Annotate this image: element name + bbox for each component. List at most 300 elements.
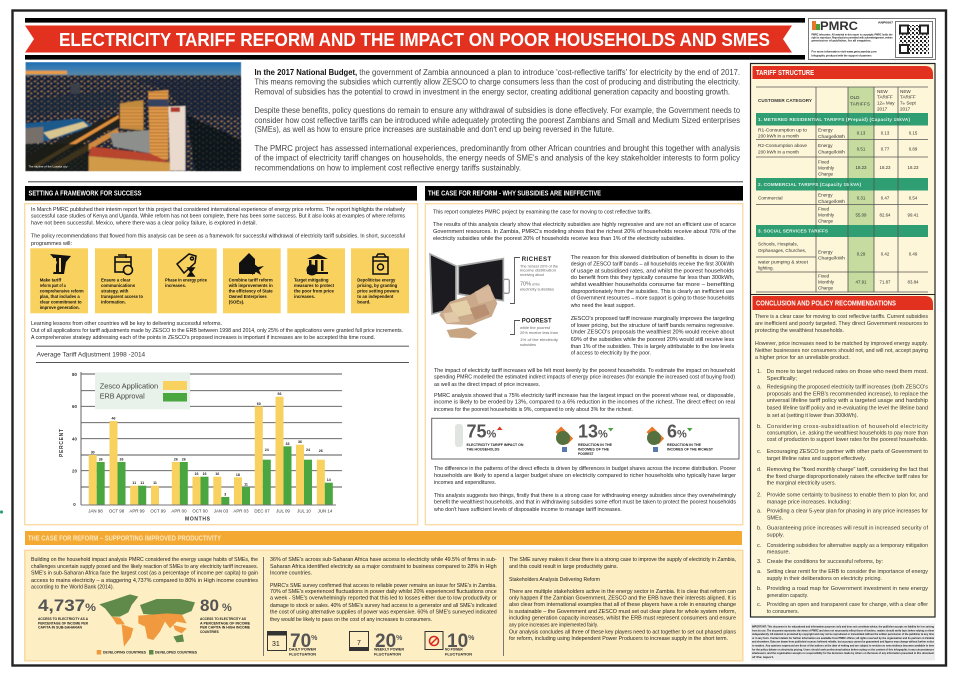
stat: 13%: REDUCTION IN THE (578, 443, 612, 447)
stat: 80%: PER CAPITA IN HIGH INCOME (200, 626, 250, 630)
intro text: Removal of subsidies has the potential to crowd in investment in the energy sector, creating additional generation capacity and boosting growth. (254, 87, 730, 97)
column 2 text: Income countries. (270, 570, 312, 576)
bar value labels: 24 (306, 448, 310, 452)
map legend: DEVELOPED COUNTRIES (155, 650, 197, 654)
tile: phase in price increases (158, 248, 217, 313)
table row labels: Charge (818, 286, 834, 290)
heading: SETTING A FRAMEWORK FOR SUCCESS (28, 191, 142, 198)
text: skewed distribution: of access to electricity by the poor. (571, 350, 651, 356)
opening text: electricity subsidies while the poorest 20% of households receive less than 1% of the electricity subsidies. (433, 236, 685, 242)
callout: poorest: while the poorest (520, 326, 550, 330)
stat: 75%: 75% (466, 422, 497, 442)
stat: 80%: COUNTRIES (200, 630, 219, 634)
chart legend (95, 372, 190, 409)
copyright note: Infographic produced with the support of partners (812, 54, 872, 58)
stat: 4,737%: ACCESS TO ELECTRICITY AS A (38, 617, 89, 621)
recommendations list: supply. (767, 533, 784, 539)
framework text: programmes will: (31, 241, 72, 247)
recommendations list: consumption, i.e. asking the wealthiest households to pay more than (767, 431, 928, 437)
recommendations list: Provide some certainty to business to enable them to plan for, and (767, 493, 928, 499)
bar value labels: 26 (174, 458, 178, 462)
table row labels: 200 kWh in a month (758, 134, 799, 138)
world map (99, 594, 195, 647)
recommendations list: b. (757, 526, 762, 532)
table row labels: Monthly (818, 280, 835, 284)
table row labels: Charge/kWh (818, 256, 845, 260)
heading: THE CASE FOR REFORM - WHY SUBSIDIES ARE INEFFECTIVE (428, 191, 601, 198)
stat: 20% weekly (350, 631, 405, 656)
disclaimer: and elsewhere. Data are drawn from published sources believed reliable, but accuracy cannot be guaranteed and figures may change without further notice (752, 640, 934, 644)
disclaimer: to readers. Any opinions expressed are those of the authors at the date of writing and are subject to revision as new evidence becomes available in time (752, 644, 934, 648)
stat: 10% none: FLUCTUATION (445, 652, 473, 656)
framework text (31, 207, 405, 247)
text: impact on households (434, 368, 735, 413)
conclusion text: protecting the wealthiest households. (755, 328, 844, 334)
tile text: Combine tariff reform (229, 278, 273, 282)
tile text: improve generation. (40, 305, 80, 310)
tile text (228, 278, 273, 304)
x axis labels: APR 03 (233, 508, 249, 514)
table row labels: water pumping & street (758, 260, 809, 264)
section labels: 2. COMMERCIAL TARIFFS (Capacity 15 kVA) (758, 182, 861, 187)
icon: calendar: 7 (357, 640, 361, 647)
text: budget shares: benefit the wealthiest households, and that in withdrawing subsidies some effort must be taken to protect the poorest households (434, 500, 736, 506)
tile text: the efficiency of State (229, 288, 273, 294)
conclusion text: However, price increases need to be matched by improved energy supply. (755, 341, 928, 347)
tile text: with improvements in (228, 283, 273, 288)
disclaimer (751, 624, 935, 660)
text: impact on households: PMRC analysis showed that a 75% electricity tariff increase has the largest impact on the poorest whose real, or disposable, (434, 393, 735, 399)
recommendations list: the marginal electricity users. (767, 481, 836, 487)
table row labels: Orphanages, Churches, (758, 248, 806, 253)
table row labels: Energy (818, 250, 833, 254)
column 3 text: Our analysis concludes all three of these key players need to act together to set out phased plans (509, 630, 736, 636)
stat: 80% (200, 596, 250, 634)
text: skewed distribution: of usage at subsidised rates, and whilst the poorest households (571, 268, 734, 274)
chart legend: ERB Approval (100, 392, 145, 400)
recommendations list: proposals and the ERB's recommended increase), to replace the (767, 392, 928, 398)
column 2 text: they would be likely to pass on the cost of any increases to consumers. (270, 617, 432, 623)
table row labels: Fixed (818, 274, 830, 278)
stat: 10% none (425, 631, 475, 656)
recommendations list: Providing a road map for Government investment in new energy (767, 586, 928, 592)
column 1 text: Building on the household impact analysis PMRC considered the energy usage habits of SMEs, the (31, 557, 258, 563)
map legend: DEVELOPING COUNTRIES (103, 650, 146, 654)
tile text (357, 278, 400, 304)
callout: richest: electricity subsidies (520, 288, 554, 292)
table header text: TARIFFS (850, 102, 870, 106)
tile text (40, 278, 84, 310)
table values: 18.23 (908, 165, 919, 170)
conclusion text: Neither businesses nor consumers should not, and will not, accept paying (755, 348, 928, 354)
framework text: In March PMRC published their interim report for this project that considered international experience of energy price reforms. The report highlights the relatively (31, 207, 405, 213)
bar value labels: 18 (236, 473, 240, 477)
recommendations list: d. (757, 467, 762, 473)
copyright note: For more information visit www.pmrczambia.com (812, 50, 877, 54)
column 1 text: SME's in sub-Saharan Africa face the largest cost (as a percentage of income per capita) to gain (31, 570, 258, 576)
framework text: successful case studies of Kenya and Uganda. While reform has not been complete, there has been some success. But it also looks at examples of where reforms (31, 214, 405, 220)
table row labels: Schools, Hospitals, (758, 242, 798, 246)
text: budget shares: incomes and expenditures. (434, 480, 496, 486)
intro text: consider how cost reflective tariffs can be introduced while adequately protecting the poorest Zambians and Small and Medium Sized enterprises (254, 115, 740, 125)
bar value labels: 26 (319, 449, 323, 453)
bars: ERB approval (97, 446, 333, 505)
recommendations list: measure. (767, 550, 790, 556)
bars: Zesco application (89, 397, 325, 505)
stat: 13%: 13% (578, 422, 608, 442)
callout: richest (510, 257, 558, 304)
y axis labels: 60 (72, 404, 77, 409)
tile text: communications (101, 283, 136, 288)
column 3 text: any price increases are implemented fairly. (509, 622, 598, 628)
table values: 0.13 (857, 130, 866, 136)
icon: meter (556, 427, 573, 452)
stat: 80%: 80 % (200, 596, 232, 615)
bar value labels: 11 (244, 482, 248, 486)
recommendations list: c. (757, 449, 762, 455)
disclaimer: independently. All material is protected by copyright and may not be reproduced or transmitted without the written permission of the publisher at any time (752, 632, 934, 636)
recommendations list: Considering cross-subsidisation of household electricity (767, 424, 928, 430)
text: skewed distribution: ZESCO's proposed tariff increase marginally improves the targeting (571, 316, 734, 322)
text: skewed distribution: disproportionately from the subsidies. This is clearly an inefficient use (571, 289, 734, 295)
tariff table (756, 87, 928, 292)
y axis labels: 80 (72, 372, 77, 377)
column 1 text: according to the World Bank (2014). (31, 584, 114, 590)
stat: 70% daily: 70 (290, 631, 311, 652)
callout: richest: The richest 20% of the (520, 264, 558, 268)
copyright note: PMRC infocentre. All material in this report is copyright; PMRC holds the (812, 32, 893, 36)
table values: 18.23 (856, 165, 867, 170)
x axis labels: OCT 00 (192, 508, 208, 514)
tile text: measures to protect (294, 283, 335, 288)
bar value labels: 14 (327, 478, 331, 482)
recommendations list: c. (757, 602, 762, 608)
bar value labels: 30 (91, 450, 95, 454)
table values: 0.89 (909, 146, 918, 152)
recommendations list: Do more to target reduced rates on those who need them most. (767, 369, 928, 375)
conclusion text (755, 314, 928, 361)
table values: 0.13 (881, 130, 890, 136)
table values: 83.84 (908, 280, 919, 284)
y axis labels (72, 372, 77, 507)
section labels: 3. SOCIAL SERVICES TARIFFS (758, 228, 828, 234)
bar value labels: 66 (278, 392, 282, 396)
heading (425, 186, 743, 201)
callout: poorest: POOREST (522, 318, 552, 324)
y axis labels: 40 (72, 436, 77, 442)
table row labels: 200 kWh in a month (758, 150, 799, 154)
stat: 80%: ACCESS TO ELECTRICITY AS (200, 617, 246, 621)
column 1 text: challenges uncertain supply posed and the likely reaction of SMEs to any electricity tariff increases. (31, 564, 258, 570)
text: budget shares (433, 466, 736, 513)
stat: 6%: REDUCTION IN THE (667, 443, 701, 447)
x axis labels: APR 99 (129, 508, 145, 514)
table row labels: Charge/kWh (818, 134, 845, 139)
lessons text: Learning lessons from other countries will be key to delivering successful reforms. (31, 321, 222, 327)
column 1 text (31, 557, 258, 590)
table row labels: Charge/kWh (818, 150, 845, 154)
tile text: price setting powers (357, 288, 400, 294)
recommendations list: 3. (757, 559, 762, 565)
x axis title: MONTHS (185, 516, 211, 522)
tile: efficiency of state enterprises (223, 248, 281, 313)
copyright note (812, 32, 893, 58)
lessons text: Out of all applications for tariff adjustments made by ZESCO to the ERB between 1998 and 2014, only 25% of the applications were granted full price increments. (31, 328, 403, 334)
icon: price tag (177, 254, 196, 276)
callout: richest: receiving about (520, 273, 544, 277)
stat: 10% none: % (468, 635, 475, 642)
table row labels: lighting. (758, 266, 774, 270)
text: skewed distribution: than 1% of the subsidies. This is largely attributable to the low levels (571, 344, 734, 350)
recommendations list: Specifically; (767, 376, 797, 382)
panel: supporting improved productivity (25, 531, 743, 661)
tile text: board. (357, 300, 370, 304)
stat: 70% daily: FLUCTUATION (289, 652, 317, 656)
table row labels: R1-Consumption up to (758, 128, 807, 132)
table values: 0.54 (909, 196, 918, 200)
table header text: OLD (850, 95, 860, 100)
tile text: to an independent (357, 294, 394, 299)
table row labels: Fixed (818, 160, 830, 164)
table header text: 2017 (877, 106, 888, 112)
conclusion text: a higher price for an unreliable product. (755, 355, 850, 361)
tile text: comprehensive reform (40, 288, 84, 294)
text: skewed distribution: whilst wealthier households consume far more – benefiting (570, 282, 734, 288)
x axis labels: OCT 98 (109, 508, 125, 514)
column 3 text: The SME survey makes it clear there is a strong case to improve the supply of electricity in Zambia, (509, 557, 736, 563)
text: skewed distribution: design of ZESCO tariff bands – all households receive the first 300kWh (571, 262, 734, 268)
recommendations list: a. (757, 569, 762, 575)
section labels (758, 117, 910, 234)
heading (25, 531, 742, 545)
tile text: Make tariff (40, 278, 62, 282)
icon: meter (647, 427, 664, 452)
green marker dot (0, 510, 3, 514)
column 1 text: access to mains electricity – a staggering 4,737% compared to 80% in High income countries (31, 578, 258, 584)
table header text: TARIFF (900, 95, 916, 100)
table header text: 2017 (900, 106, 911, 112)
intro text: (SMEs), as well as how to ensure price increases are sustainable and don't end up being reversed in the future. (254, 124, 614, 134)
table row labels: Charge (818, 172, 834, 176)
callout: poorest: 20% receive less than (520, 331, 558, 335)
stat: 4,737%: 4,737 % (38, 596, 96, 615)
stat: 13%: POOREST (578, 452, 594, 456)
stat: 20% weekly: 20 (375, 631, 396, 652)
conclusion text: There is a clear case for moving to cost reflective tariffs. Current subsidies (755, 314, 928, 320)
column 2 text: the cost of using alternative supplies of power was expensive. 60% of SME's surveyed indicated (270, 610, 497, 616)
column 2 text: 70% of SME's experienced fluctuations in power daily whilst 20% experienced fluctuations once (270, 589, 497, 595)
photo: Lusaka city at dusk (25, 62, 241, 171)
icon: PMRC mark (812, 21, 820, 30)
icon: institution and globe (306, 254, 328, 276)
bar value labels: 16 (194, 472, 198, 476)
bar value labels: 11 (132, 481, 136, 485)
table row labels: Charge (818, 218, 834, 224)
column 3 text: also clear from international examples that all of these players have a role in ensuring change (509, 602, 736, 608)
recommendations list: 2. (757, 493, 762, 499)
tile: make tariff reform part of a plan (30, 248, 88, 313)
tile text (101, 278, 143, 304)
table row labels: Fixed (818, 206, 830, 212)
column 3 text: is sustainable – the Government and ZESCO must set out clear plans for whole system reform, (509, 609, 736, 615)
heading: THE CASE FOR REFORM – SUPPORTING IMPROVED PRODUCTIVITY (28, 536, 221, 542)
intro text (254, 67, 741, 173)
text: skewed distribution: do benefit from this they typically consume far less than 300kWh, (571, 275, 735, 281)
text: skewed distribution: of lower pricing, but the structure of tariff bands remains regressive. (571, 323, 735, 329)
column 2 text: PMRC's SME survey confirmed that access to reliable power remains an issue for SME's in Zambia. (270, 583, 497, 589)
table values: 55.09 (856, 212, 867, 218)
disclaimer: or in any form. Contact details for further information are available from PMRC offices; all rights reserved by the organisation and its partners in Zambia (752, 636, 934, 640)
tile text (165, 278, 208, 288)
column 3 text (509, 557, 736, 642)
tile text: (SOEs). (229, 300, 244, 304)
tile text: Depoliticise energy (357, 278, 396, 282)
text: impact on households: incomes for the poorest households is 9%, compared to only about 3% for the richest. (434, 407, 633, 413)
stat: 6%: INCOMES OF THE RICHEST (667, 448, 713, 452)
heading: conclusion (752, 296, 933, 310)
recommendations list: Encouraging ZESCO to partner with other parts of Government to (767, 449, 928, 455)
text: budget shares: The difference in the patterns of the direct effects is driven by differences in budget shares across the income distribution. Poorer (434, 466, 736, 472)
tile text: Phase in energy price (165, 278, 208, 282)
text: skewed distribution (570, 255, 735, 356)
recommendations list: b. (757, 586, 762, 592)
recommendations list: based lifeline tariff policy and re-evaluating the level the lifeline band (767, 406, 928, 412)
recommendations list: universal lifeline tariff policy with a targeted usage and hardship (767, 398, 928, 404)
panel: tariff structure and conclusion (750, 64, 935, 617)
heading: tariff structure (752, 66, 933, 79)
intro text: Despite these benefits, policy questions do remain to ensure any withdrawal of subsidies is done effectively. For example, the Government needs to (254, 105, 740, 115)
panel: PMRC logo and QR (808, 18, 936, 60)
text: budget shares: who don't have sufficient levels of disposable income to manage tariff increases. (433, 507, 622, 513)
x axis labels: JUL 10 (297, 508, 311, 514)
tile text: transparent access to (101, 294, 143, 299)
x axis labels: OCT 99 (150, 508, 166, 514)
reference code: ANP0067 (878, 20, 894, 24)
text: impact on households: as well as the direct impact of price increases. (434, 382, 540, 388)
tile text: Target mitigating (294, 278, 329, 282)
table values: 47.91 (856, 280, 867, 284)
table header text (758, 89, 917, 112)
opening text: This report completes PMRC project by examining the case for moving to cost reflective tariffs. (433, 210, 652, 216)
column 2 text (270, 557, 497, 623)
stat: 70% daily: DAILY POWER (289, 648, 317, 652)
x axis labels: JUL 09 (276, 508, 290, 514)
table row labels: Energy (818, 128, 833, 132)
y axis labels: 20 (72, 468, 77, 474)
text: budget shares: households are likely to spend a larger budget share on electricity compared to richer households who typically have larger (434, 473, 736, 479)
lessons text: A comprehensive strategy addressing each of the points in ZESCO's proposed increases is important if increases are to be accepted this time round. (31, 335, 375, 341)
recommendations list: SMEs. (767, 516, 784, 522)
panel: setting a framework (25, 186, 418, 525)
column 2 text: 36% of SME's across sub-Saharan Africa have access to electricity while 49.5% of firms in sub- (270, 557, 497, 563)
column 3 text: only happen if the Zambian Government, ZESCO and the ERB have their interests aligned. It is (509, 596, 736, 602)
opening text: Government resources. In Zambia, PMRC's modeling shows that the richest 20% of households receive about 70% of the (433, 229, 736, 235)
stat: 20% weekly: % (396, 635, 403, 642)
table values: 0.29 (857, 252, 866, 256)
table values: 0.77 (881, 146, 890, 152)
y axis title: PERCENT (59, 429, 65, 457)
column 2 text: a week - SME's overwhelmingly reported that this led to losses either due to low productivity or (270, 596, 497, 602)
recommendations list: the fixed charge disproportionately raises the effective tariff rates for (767, 474, 928, 480)
callout: richest: income distribution (520, 268, 556, 272)
intro text: recommendations on how to implement cost reflective energy tariffs sustainably. (254, 163, 521, 173)
tile text (294, 278, 335, 299)
icon: pylon (50, 254, 71, 274)
table values: 0.15 (909, 130, 918, 136)
column 2 text: Saharan Africa identified electricity as a major constraint to business compared to 28% in High (270, 564, 497, 570)
text: budget shares: This analysis suggests two things, firstly that there is a strong case for withdrawing energy subsidies since they overwhelmingly (434, 493, 736, 499)
callout: richest: RICHEST (522, 257, 552, 263)
bar value labels: 26 (182, 458, 186, 462)
heading: conclusion: CONCLUSION AND POLICY RECOMMENDATIONS (756, 300, 896, 308)
bar value labels (91, 392, 331, 496)
callout: richest: 70% of the (520, 282, 540, 288)
tile text: strategy, with (101, 288, 129, 294)
icon: light bulb (455, 424, 463, 447)
x axis labels: JAN 03 (214, 508, 229, 514)
tile text: Ensure a clear (101, 278, 131, 282)
callout: poorest: subsidies (520, 343, 536, 347)
recommendations list: Removing the "fixed monthly charge" tariff, considering the fact that (767, 467, 928, 473)
stat: 4,737%: PERCENTAGE OF INCOME PER (38, 621, 89, 625)
lessons text (31, 321, 403, 341)
text: skewed distribution: Under ZESCO's proposals the wealthiest 20% would receive about (571, 330, 735, 336)
panel: why subsidies are ineffective (425, 186, 743, 525)
stat: 70% daily (268, 631, 318, 656)
intro text: In the 2017 National Budget, the government of Zambia announced a plan to introduce 'cost-reflective tariffs' for electricity by the end of 2017. (254, 67, 740, 77)
framework text: The policy recommendations that flowed from this analysis can be seen as a framework for successful withdrawal of electricity tariff subsidies. In short, successful (31, 234, 405, 240)
logo text: PMRC (820, 19, 858, 33)
table values: 0.51 (857, 146, 866, 152)
text: skewed distribution: The reason for this skewed distribution of benefits is down to the (571, 255, 734, 261)
table header text: 12th May (877, 101, 895, 106)
icon: safe box (373, 254, 388, 274)
intro text: This means removing the subsidies which currently allow ZESCO to charge consumers less than the cost of producing and distributing the electricity. (254, 77, 740, 87)
disclaimer: for the policy debate on electricity pricing. Users should seek professional advice before acting on the content of this infographic in any circumstances (752, 647, 934, 651)
table row labels: Energy (818, 192, 833, 198)
table values: 18.23 (880, 165, 891, 170)
framework text: have not been successful. Mexico, where there was a clear policy failure, is explored in detail. (31, 220, 257, 226)
table header text: CUSTOMER CATEGORY (758, 98, 812, 103)
bar chart: average tariff adjustment (59, 372, 342, 522)
disclaimer: IMPORTANT: This document is for educational and information purposes only and does not constitute advice; the publisher accepts no liability for loss arising (752, 624, 934, 628)
opening text: The results of this analysis clearly show that electricity subsidies are highly regressive and are not an efficient use of scarce (433, 222, 736, 228)
bar value labels: 16 (215, 472, 219, 476)
stat: 20% weekly: WEEKLY POWER (374, 648, 405, 652)
stat: 80%: A PERCENTAGE OF INCOME (200, 621, 250, 625)
tile text: clear commitment to (40, 300, 82, 304)
column 3 text: Stakeholders Analysis Delivering Reform (509, 577, 600, 583)
text: impact on households: The impact of electricity tariff increases will be felt most keenly by the poorest households. To estimate the impact on household (434, 368, 735, 374)
title banner (25, 18, 805, 60)
stat: 75%: THE HOUSEHOLDS (466, 448, 500, 452)
copyright note: permission of publisher, for all enquiries. (812, 38, 872, 42)
bar value labels: 33 (286, 442, 290, 446)
column 3 text: including generation capacity increases, whilst the ERB must represent consumers and ensure (509, 616, 736, 622)
recommendations list: target lifeline rates and support effectively. (767, 456, 866, 462)
recommendations list: is set at (setting it lower than 300kWh). (767, 413, 858, 419)
recommendations list: supply in their deliberations on electricity pricing. (767, 576, 882, 582)
recommendations list: cost of production to support lower rates for the poorest households. (767, 437, 928, 443)
recommendations list (757, 369, 928, 615)
map legend (97, 650, 197, 654)
icon: folder with info (115, 255, 132, 274)
bar value labels: 3 (224, 492, 226, 496)
table row labels: Energy (818, 143, 833, 148)
table values: 0.49 (909, 252, 918, 256)
stat box (432, 418, 739, 459)
text: impact on households: spending PMRC modelled the estimated indirect impacts of energy price increases (for example the increased cost of buying food) (434, 374, 735, 380)
